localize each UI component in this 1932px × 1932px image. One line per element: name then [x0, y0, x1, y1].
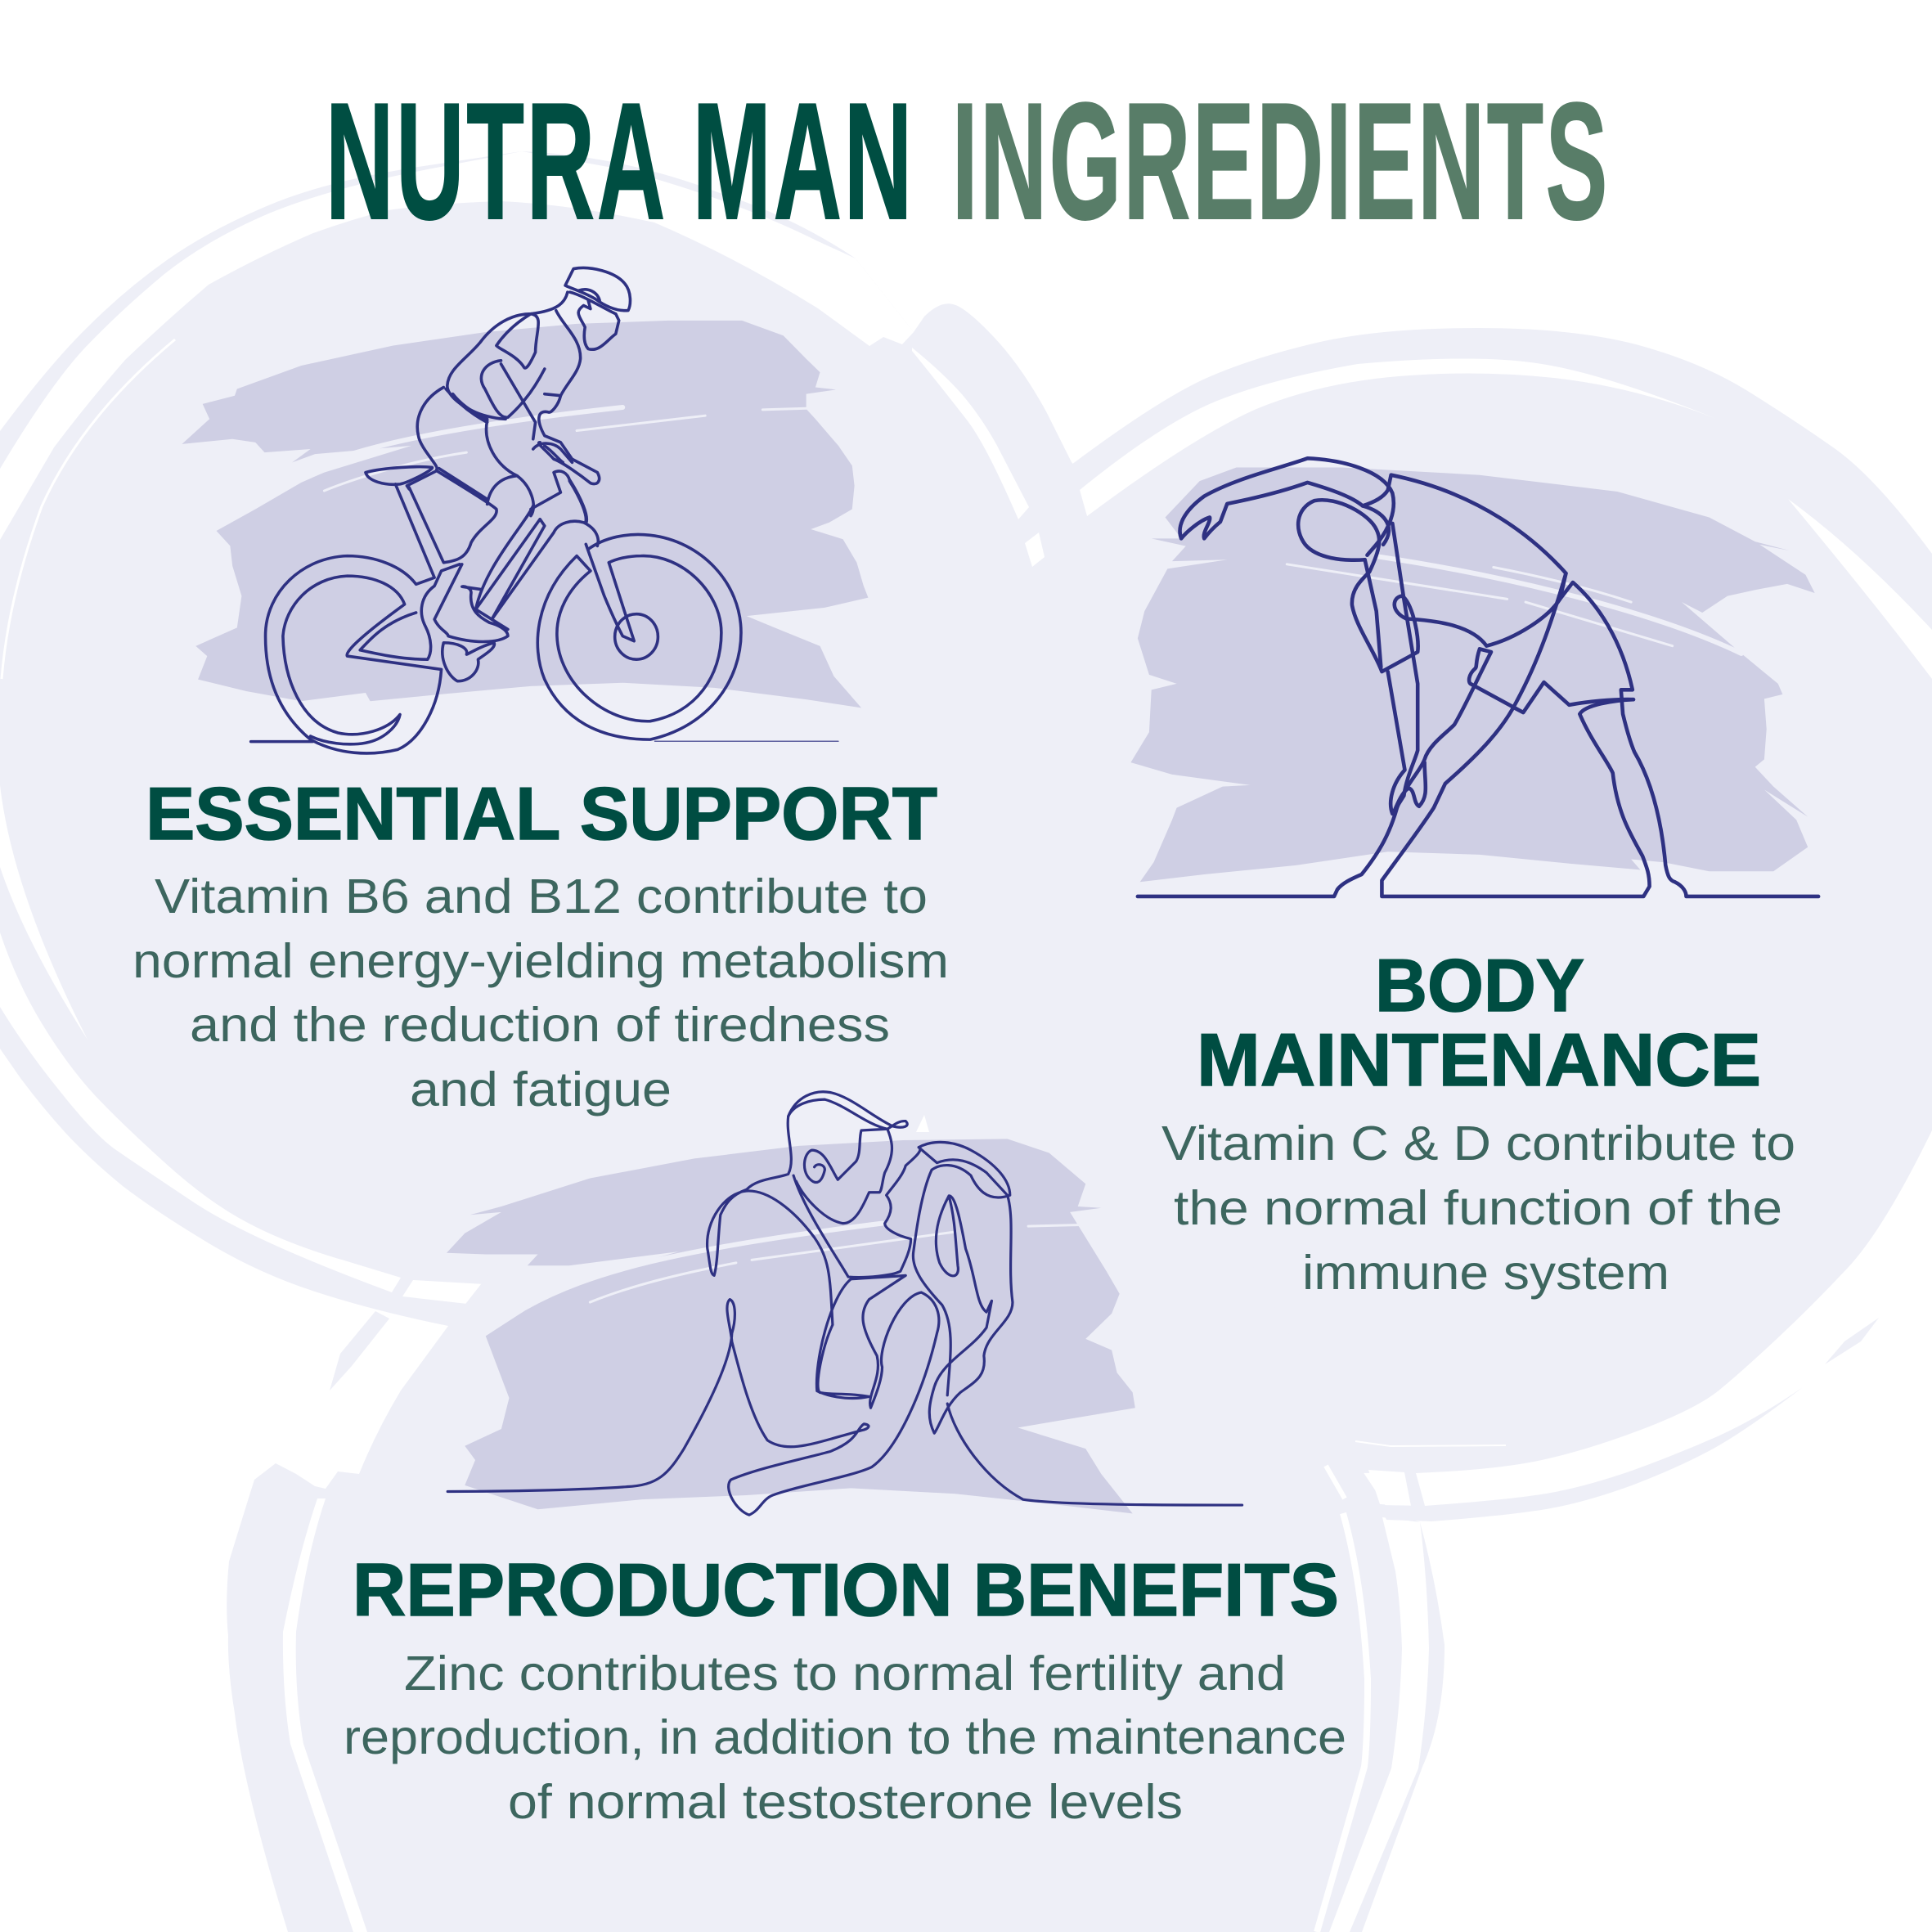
text block: essential support: and the reduction of tiredness [190, 998, 890, 1052]
panel: reproduction benefits illustration [447, 1092, 1242, 1515]
panel: essential support illustration [182, 268, 868, 753]
text block: reproduction benefits: Zinc contributes to normal fertility and [404, 1647, 1286, 1701]
background blob: bottom circle [227, 1063, 1879, 1932]
heading: reproduction benefits: REPRODUCTION BENEFITS [353, 1549, 1339, 1632]
brush stroke behind couple [447, 1139, 1135, 1513]
text block: essential support [133, 869, 949, 1117]
heading: body maintenance: MAINTENANCE [1197, 1019, 1761, 1102]
cyclist line art [251, 268, 838, 753]
text block: body maintenance: the normal function of the [1174, 1181, 1782, 1235]
brush stroke behind stretching figure [1130, 467, 1815, 882]
heading: body maintenance: BODY [1375, 945, 1584, 1027]
title: NUTRA MAN [326, 69, 914, 254]
text block: body maintenance: immune system [1302, 1246, 1669, 1300]
background blob: right circle [982, 328, 1932, 1473]
heading: essential support: ESSENTIAL SUPPORT [146, 773, 937, 856]
text block: essential support: Vitamin B6 and B12 contribute to [155, 869, 928, 923]
brush stroke behind cyclist [182, 321, 868, 708]
heading: body maintenance [1197, 945, 1761, 1102]
text block: body maintenance: Vitamin C & D contribute to [1161, 1117, 1795, 1170]
text block: reproduction benefits [344, 1647, 1346, 1829]
text block: body maintenance [1161, 1117, 1795, 1300]
stretching figure line art [1138, 458, 1818, 896]
text block: reproduction benefits: of normal testosterone levels [508, 1775, 1183, 1829]
background blob: top left circle [0, 151, 1227, 1326]
couple line art [447, 1092, 1242, 1515]
text block: reproduction benefits: reproduction, in addition to the maintenance [344, 1710, 1346, 1764]
text block: essential support: and fatigue [410, 1063, 672, 1117]
text block: essential support: normal energy-yielding metabolism [133, 934, 949, 988]
panel: body maintenance illustration [1130, 458, 1818, 896]
